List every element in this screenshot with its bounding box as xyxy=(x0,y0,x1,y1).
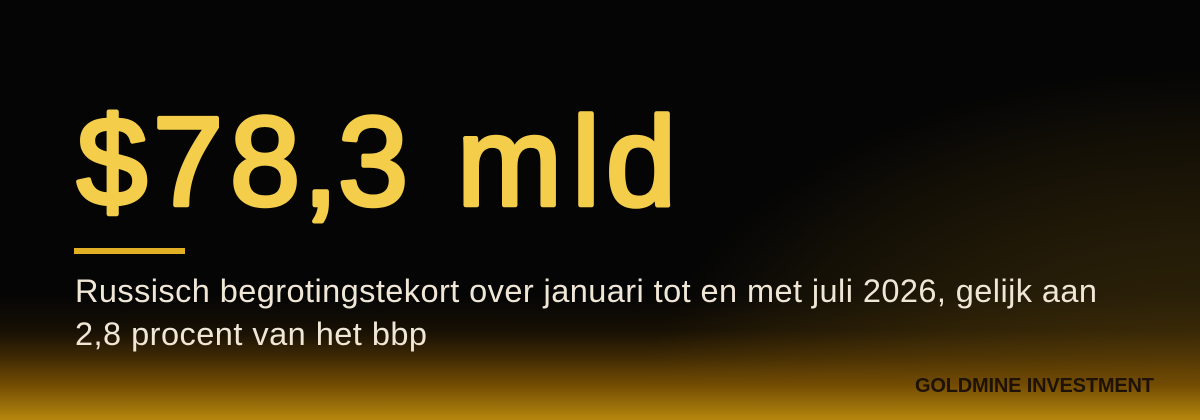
description line 1: Russisch begrotingstekort over januari tot en met juli 2026, gelijk aan xyxy=(75,273,1097,309)
description line 2: 2,8 procent van het bbp xyxy=(75,316,427,352)
accent rule xyxy=(74,248,185,254)
headline figure: $78,3 mld xyxy=(77,91,676,232)
brand name: GOLDMINE INVESTMENT xyxy=(915,375,1154,397)
description text xyxy=(75,273,1097,352)
